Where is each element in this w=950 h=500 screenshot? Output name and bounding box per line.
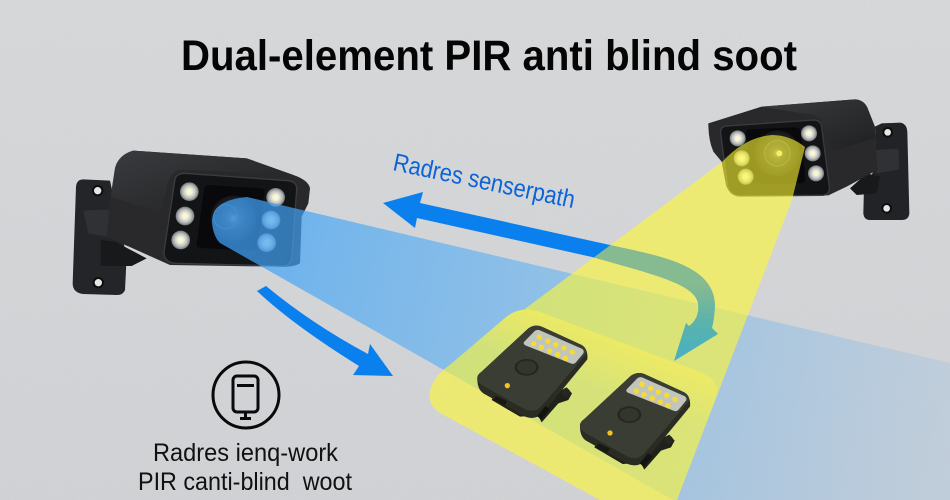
title: Dual-element PIR anti blind soot [181, 32, 797, 80]
camera: right security camera [708, 99, 909, 220]
zone highlight [429, 310, 717, 500]
arrow: blue sensor path [383, 192, 718, 361]
caption [138, 439, 352, 496]
yellow coverage beam and zone [429, 135, 805, 500]
device: right sensor module [580, 373, 690, 470]
arrow: sensor path over yellow zone [594, 245, 718, 361]
caption: Radres ienq-work [153, 439, 338, 467]
arrow: lower blue arrow [257, 286, 393, 376]
icon: monitor device in circle [213, 362, 279, 428]
camera: left security camera [73, 151, 310, 295]
blue sensor beam [212, 197, 950, 500]
caption: PIR canti-blind woot [138, 468, 352, 496]
label: sensor path: Radres senserpath [391, 148, 578, 214]
device: left sensor module [477, 326, 587, 422]
